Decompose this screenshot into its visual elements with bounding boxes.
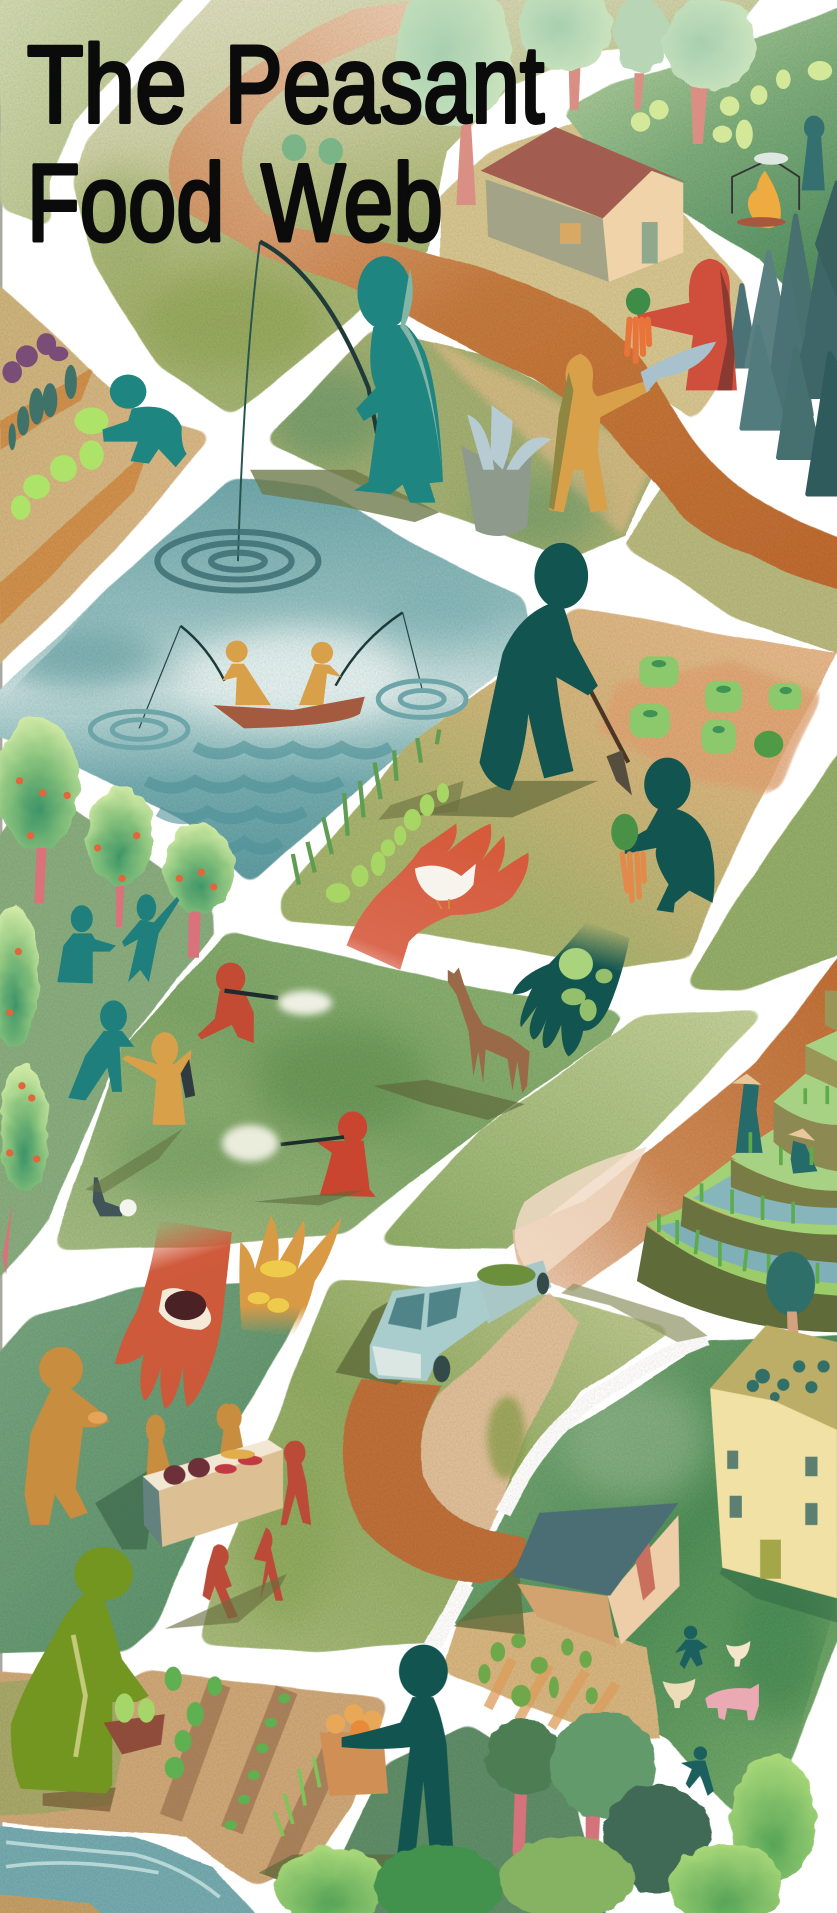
seedlings [326,783,449,903]
building walls [710,1388,837,1598]
bending farmer hat [788,1129,815,1141]
cooking rack [732,159,799,214]
basket [104,1714,165,1754]
panel: truck road curve [343,1379,526,1584]
farmer body [480,604,598,791]
house roof [481,127,688,218]
top terrace surface [805,1031,837,1061]
fisherman with rod [157,242,551,590]
ochre fishers [222,641,342,705]
reeds [293,730,439,885]
stall top [143,1440,283,1491]
meats and produce [163,1449,262,1485]
cabbage heads [630,656,802,758]
shadow under building [720,1537,837,1623]
yellow farmhouse [710,1252,837,1623]
peach bank green wash [487,1396,526,1479]
onion shoots [275,1757,320,1836]
ochre woman [24,1347,110,1525]
ochre person [549,354,650,512]
ochre person shadow side [549,372,573,510]
panel: small shed plot [442,1610,659,1739]
field blotches [268,329,659,549]
panel: forest meadow [560,0,837,366]
tree trunks [2,848,201,1275]
pickup truck [336,1260,551,1385]
red hand offering meat [115,1220,232,1409]
stream waves [6,1842,220,1897]
tree on roof [766,1252,815,1315]
lower rifle [281,1137,344,1144]
woman holding fruit [88,1412,107,1424]
red person hair shadow [717,268,735,390]
figure body [342,1697,454,1861]
title word: The: The [27,24,187,146]
lower terrace wall [637,1226,837,1332]
barn [454,1503,680,1647]
barn front [517,1584,616,1647]
boat fishers [90,612,466,849]
standing farmer hat [732,1074,761,1085]
wheels [433,1355,450,1382]
orange hand offering coins [239,1215,342,1336]
roof plants [747,1360,830,1402]
seedlings [478,1634,598,1707]
panel: lower green field [317,1724,610,1913]
seedling row and reeds [293,730,464,903]
hunters [93,963,376,1216]
distant person [802,116,825,190]
farmer head [534,543,588,609]
upper terrace wall [774,1102,837,1171]
plot soil row [6,381,134,610]
fish bucket [461,445,532,536]
panel: rust path [250,220,837,594]
hand [347,824,529,970]
waves [146,747,390,849]
green woman with basket [11,1547,165,1812]
pond light and dark washes [12,580,500,723]
llama body [448,967,530,1093]
llama shadow [373,1080,525,1120]
title word: Web: Web [261,142,443,264]
panel: plot under green figure [0,1678,134,1818]
lower plot rows [165,1667,342,1879]
steak red [165,1291,206,1320]
lower hunter [315,1111,376,1197]
pine forest [730,183,837,494]
silver fish [641,342,716,393]
roof terrace [710,1325,837,1440]
title word: Food: Food [27,142,225,264]
upper rifle [225,991,278,998]
hand [239,1215,342,1336]
third terrace wall [681,1196,837,1263]
carrot tops [611,814,638,850]
woman shadow [43,1787,116,1812]
ripples [90,681,466,748]
hand [115,1220,232,1409]
purple cabbages [2,333,68,383]
pig [705,1684,759,1720]
lower terrace surface [647,1208,837,1296]
dark leafy crops [9,365,77,450]
red hand holding chicken [347,824,529,970]
chicken legs [437,899,449,909]
child running [675,1626,708,1669]
figure head [399,1645,448,1698]
red person [637,259,737,390]
terrace farmer bending [791,1141,817,1174]
vegetable rows with child picker [2,333,187,520]
tree trunk [787,1312,800,1357]
truck grille [372,1346,421,1379]
fishing rod [260,242,377,433]
lettuce crops [11,407,109,520]
carrot tops [626,288,650,315]
seedling shadow [378,781,464,820]
chicken body [415,864,476,901]
pair exchanging fruit [57,894,179,983]
trunks [512,1787,600,1861]
fisherman shadow [250,470,439,522]
logs [737,217,786,227]
ochre trader [122,1032,192,1125]
hen [726,1641,750,1667]
basket produce [326,1704,382,1740]
farmer with hoe [415,543,715,913]
rice shoots [659,1086,827,1283]
house walls [486,179,609,282]
hoe [567,647,628,763]
title word: Peasant: Peasant [225,24,544,146]
field path near truck [561,1283,708,1342]
panel: narrow diagonal field [373,1009,769,1248]
meadow road lower segment [432,1584,466,1647]
ripples [157,532,318,590]
kneeling person head [644,758,691,811]
truck bed [476,1260,551,1324]
building windows [727,1451,817,1525]
stall front [159,1449,283,1547]
green hand holding cabbage [512,921,630,1057]
basket [320,1732,388,1796]
panel: central fisher field [265,327,665,559]
meadow plants [631,61,832,149]
crowns [275,1712,816,1913]
kneeling person body [625,808,715,913]
upper hunter [198,963,254,1043]
top terrace wall [805,991,837,1088]
right dirt bank and peach wash [515,1147,647,1281]
fish and carrot exchange [549,259,737,512]
barnyard animals and children [663,1626,759,1796]
bucket fish [467,405,551,470]
third terrace surface [683,1159,837,1235]
leaf fragments [561,969,612,1021]
cabbages [630,656,802,758]
title [27,24,544,264]
boat [214,697,365,728]
panel: upper central field [73,0,781,417]
steak [159,1288,211,1330]
field blotches [73,171,323,372]
figure shadow [259,1854,421,1885]
fisherman head [357,256,411,329]
pair exchanging dark fruit [68,1000,134,1100]
orchard with people [0,717,233,1275]
hunters field blotches [110,1025,427,1196]
truck field blotches [238,1452,336,1623]
second terrace wall [731,1159,837,1208]
barn door [634,1542,655,1601]
truck windows [388,1287,461,1330]
rabbit tail [120,1199,137,1216]
upper terrace surface [774,1074,837,1125]
small plants [282,134,343,165]
rows [488,1659,616,1732]
truck body [370,1281,490,1381]
barn side [608,1515,680,1645]
woman head [74,1547,133,1601]
farmer shadow [415,781,598,817]
hen [663,1679,695,1708]
fisherman body [354,325,443,503]
gold coins [248,1260,296,1313]
truck cargo [477,1264,536,1286]
llama [373,967,530,1120]
panel: lower vegetable plot [0,1668,389,1886]
robe highlight [400,268,442,470]
child running [681,1746,714,1796]
stall shadow [95,1464,159,1549]
panel: small eastern field [622,473,837,659]
dark catch [181,1059,195,1098]
panel: orchard field [0,781,215,1293]
panel: market field [0,1280,315,1656]
left image edge [0,0,2,1913]
panel: building meadow [454,1332,837,1818]
house window [560,223,581,244]
crop plants [165,1667,290,1830]
hunter shadow [254,1190,366,1205]
barn roof [512,1503,678,1596]
market stall group [24,1347,311,1629]
top tree group [395,0,756,205]
garden rows by barn [478,1634,616,1732]
rear wheel [537,1272,549,1294]
panel: stream [0,1825,268,1913]
fire [748,171,781,228]
house door [642,222,658,264]
barn shadow [454,1564,525,1635]
upper smoke [278,991,332,1015]
lower terrace water [656,1220,837,1283]
basket greens [115,1693,155,1723]
fishing line [238,242,260,561]
panel: truck road peach bank [420,1293,580,1530]
woman body [11,1592,149,1793]
tree crowns [395,0,756,126]
panel: truck road field [198,1277,677,1653]
rods [181,612,403,686]
soil rows [171,1684,342,1879]
shoppers shadow [165,1574,287,1629]
grilled fish [754,153,788,165]
building door [760,1540,781,1579]
house [481,127,688,282]
red shoppers [203,1441,311,1619]
soil patch [598,659,825,793]
house side wall [603,171,683,282]
children at stall [146,1404,244,1476]
arm highlight [73,1635,85,1757]
panel: left vegetable plot [0,275,215,677]
child picking lettuce [102,375,187,467]
panel: eastern strip [683,732,837,991]
cabbage in palm [559,948,593,980]
panel: pond [0,478,534,886]
panel: top-left field [0,0,207,232]
figure with harvest basket [259,1645,454,1885]
panel: hunters field [51,930,625,1252]
lower smoke [222,1125,278,1161]
panel: terraced hillside and road [512,939,837,1293]
fruit tree crowns [0,717,233,1192]
campfire with fish [732,116,825,228]
rabbit [93,1177,122,1216]
meadow blotches [561,1379,830,1720]
meadow road upper segment [503,1338,708,1513]
carrots [627,320,649,361]
terraced rice hills [637,991,837,1332]
terrace farmer standing [736,1080,763,1153]
fishing lines [139,612,422,728]
truck shadow [336,1293,421,1385]
stall side [143,1476,162,1547]
panel: house and path field [439,122,747,421]
panel: bottom-left bank [0,1879,146,1913]
panel: farmer and cabbage field [281,606,837,970]
third terrace water [693,1171,837,1225]
hand [512,921,630,1057]
panel: tan path [169,0,421,253]
shadow [85,1129,183,1193]
cabbage hearts [643,660,792,733]
second terrace surface [731,1129,837,1191]
tree trunks [456,61,708,205]
carrots [622,854,644,900]
hoe blade [606,750,632,795]
fruit [6,777,217,1163]
bottom trees [275,1712,816,1913]
